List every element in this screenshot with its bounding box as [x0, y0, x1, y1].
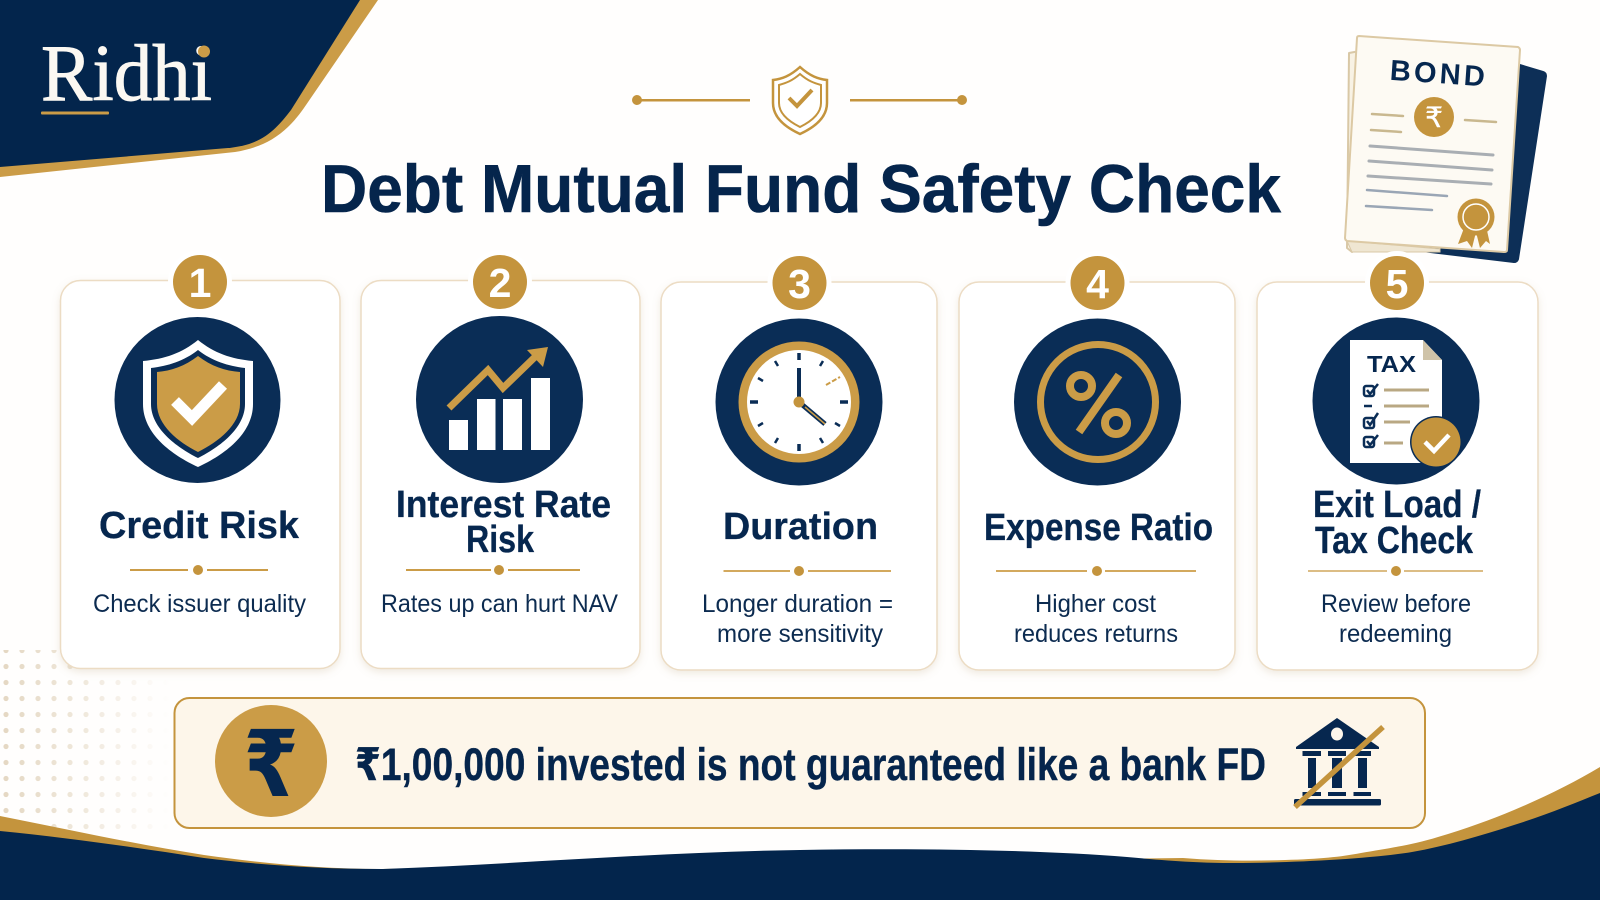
title ornament with shield	[632, 67, 967, 134]
document lines	[1366, 114, 1496, 210]
panel: exit load / tax check	[1257, 251, 1538, 670]
background dot pattern	[4, 650, 148, 829]
card	[661, 282, 937, 670]
bond label: BOND	[1389, 55, 1486, 93]
back sheet	[1347, 50, 1365, 252]
panel: credit risk	[60, 250, 340, 668]
logo: Ridhi	[41, 30, 212, 118]
icon: rupee coin: ₹	[243, 713, 299, 816]
badge 5	[1365, 251, 1429, 315]
icon: tax document: TAX	[1367, 351, 1416, 377]
heading: Expense Ratio	[984, 507, 1213, 549]
title: Debt Mutual Fund Safety Check	[321, 151, 1281, 227]
card	[60, 280, 340, 668]
panel: expense ratio: reduces returns	[1014, 620, 1178, 648]
heading: Duration	[723, 506, 878, 548]
icon: rupee coin	[215, 705, 327, 817]
gold wave edge	[0, 767, 1600, 900]
description: Rates up can hurt NAV	[381, 590, 618, 618]
panel: duration: more sensitivity	[717, 620, 883, 648]
heading: Credit Risk	[99, 505, 300, 547]
bottom wave	[0, 767, 1600, 900]
lower stacked sheet	[1347, 241, 1440, 252]
badge 2	[468, 250, 532, 314]
seal	[1458, 198, 1494, 248]
icon: shield	[114, 317, 280, 483]
icon: bond document	[1345, 36, 1546, 262]
icon: clock	[716, 318, 882, 486]
callout banner	[174, 698, 1425, 828]
icon: crossed-out bank	[1294, 718, 1383, 807]
navy folder behind	[1355, 62, 1546, 262]
description: Review before	[1321, 590, 1471, 618]
badge 4	[1066, 251, 1130, 315]
rupee coin	[1414, 97, 1454, 137]
badge 1: 1	[189, 260, 211, 306]
card	[361, 280, 640, 668]
panel: exit load / tax check: Tax Check	[1315, 520, 1474, 562]
icon: tax document	[1312, 318, 1480, 484]
description: Longer duration =	[702, 590, 893, 618]
navy wave	[0, 793, 1600, 900]
description: Higher cost	[1035, 590, 1156, 618]
panel: exit load / tax check: redeeming	[1339, 620, 1452, 648]
description: Check issuer quality	[93, 590, 306, 618]
rupee coin: ₹	[1425, 102, 1443, 133]
heading: Interest Rate	[396, 484, 611, 526]
badge 5: 5	[1386, 261, 1408, 307]
card	[1257, 282, 1538, 670]
navy ribbon	[0, 0, 360, 167]
panel: interest rate risk	[361, 250, 640, 668]
banner text: ₹1,00,000 invested is not guaranteed like a bank FD	[355, 739, 1266, 790]
badge 4: 4	[1086, 261, 1109, 307]
icon: percent	[1014, 318, 1181, 486]
card	[959, 282, 1235, 670]
badge 3	[768, 251, 832, 315]
front sheet	[1345, 36, 1520, 252]
badge 1	[168, 250, 232, 314]
panel: expense ratio	[959, 251, 1235, 670]
header ribbon with logo	[0, 0, 378, 177]
gold ribbon edge	[0, 0, 378, 177]
heading: Exit Load /	[1313, 484, 1481, 526]
icon: rising chart	[416, 316, 583, 483]
badge 3: 3	[788, 261, 811, 307]
banner box	[174, 698, 1425, 828]
badge 2: 2	[489, 260, 511, 306]
panel: interest rate risk: Risk	[466, 519, 535, 561]
panel: duration	[661, 251, 937, 670]
